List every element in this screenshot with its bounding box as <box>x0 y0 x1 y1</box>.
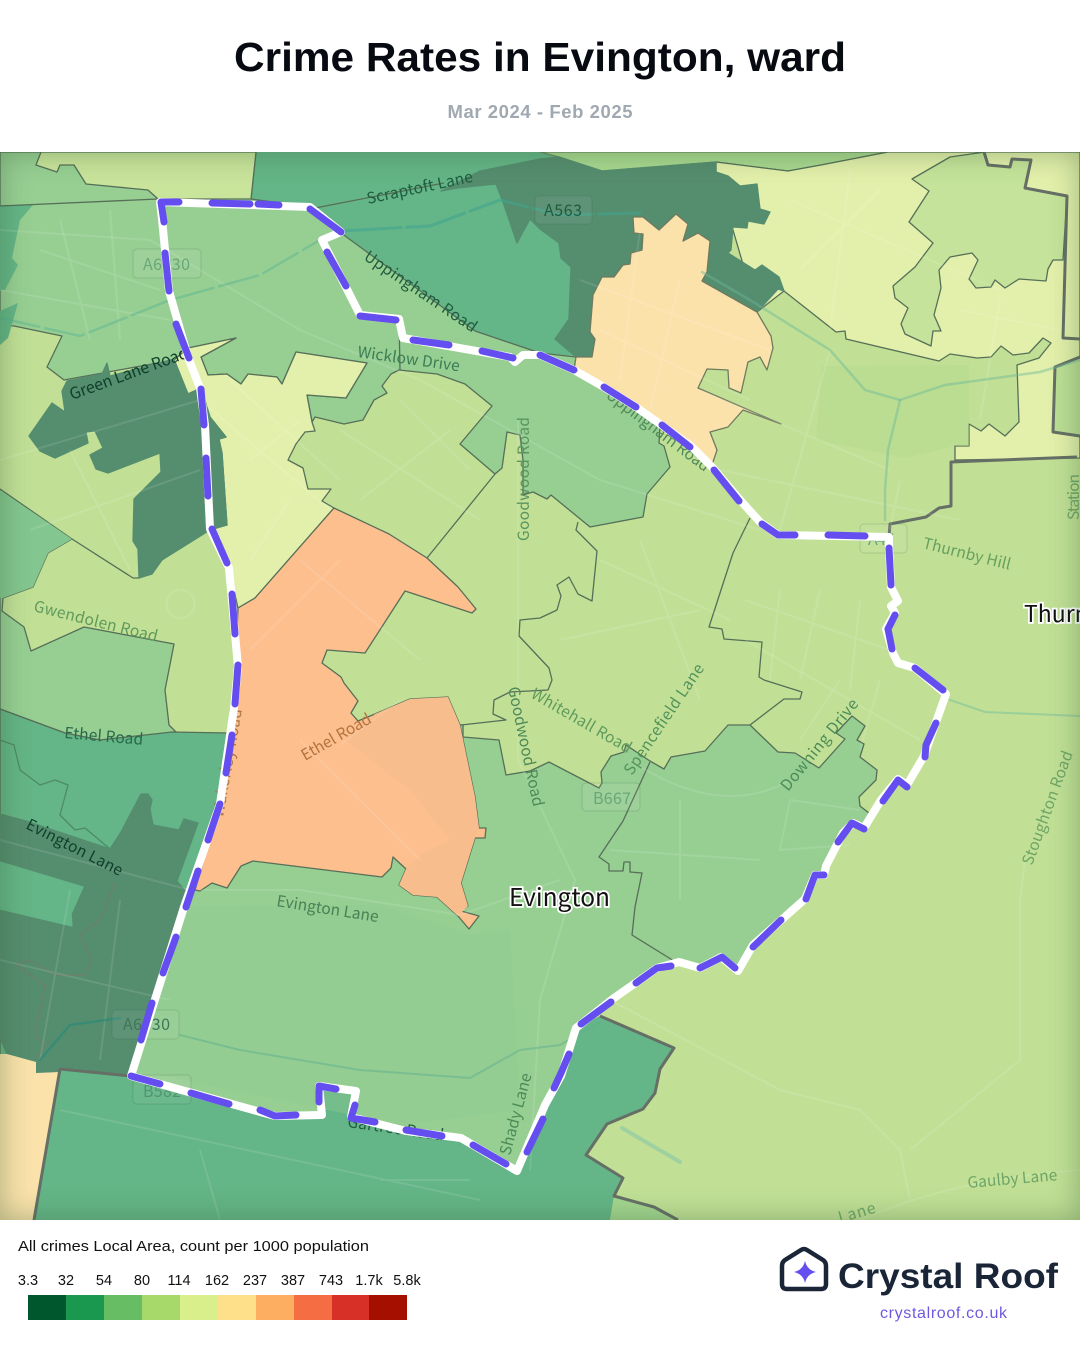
legend <box>18 1239 421 1320</box>
map road labels: Uppingham Road <box>602 383 715 476</box>
map road labels: Shady Lane <box>494 1070 537 1157</box>
legend scale values: 5.8k <box>393 1273 421 1289</box>
area: north dark green <box>441 157 784 357</box>
legend scale values <box>18 1273 421 1289</box>
legend scale values: 1.7k <box>355 1273 383 1289</box>
map road labels: Stoughton Road <box>1016 747 1078 868</box>
legend scale values: 743 <box>319 1273 343 1289</box>
area: central pale <box>174 338 367 608</box>
place label: Evington: Evington <box>509 879 610 914</box>
area: peach darker shading <box>345 697 479 916</box>
area: north strip <box>540 152 888 171</box>
legend scale values: 114 <box>167 1273 191 1289</box>
map road labels: Gartree Road <box>346 1110 445 1145</box>
area: east edge light green <box>1053 357 1080 436</box>
map road labels: Ethel Road <box>296 707 375 765</box>
map road labels: A6030 <box>143 251 190 275</box>
map road labels <box>23 165 1080 1228</box>
area: far-west teal lower <box>0 303 18 345</box>
area: west medium green lower <box>0 489 176 740</box>
area: far-west teal upper <box>0 205 33 290</box>
legend scale values: 387 <box>281 1273 305 1289</box>
map road labels: Evington Lane <box>23 813 127 881</box>
map road labels: A563 <box>544 197 582 221</box>
area: peach high crime <box>195 508 486 929</box>
map road labels: Uppingham Road <box>360 245 482 337</box>
website: crystalroof.co.uk <box>880 1305 1008 1322</box>
map edge vignette <box>0 152 1080 1220</box>
map road labels: Evington Lane <box>275 889 380 927</box>
wordmark: Crystal Roof <box>838 1257 1058 1296</box>
road number boxes <box>112 196 907 1104</box>
map area polygons <box>0 152 1080 1220</box>
map road labels: Lane <box>835 1196 878 1228</box>
map road labels: B582 <box>143 1078 181 1102</box>
map road labels: Goodwood Road <box>503 684 550 808</box>
legend scale values: 54 <box>96 1273 112 1289</box>
white footer band <box>0 1220 1080 1350</box>
map road labels: Gwendolen Road <box>32 595 160 647</box>
area: teal enclave in dark <box>0 862 83 926</box>
legend scale values: 237 <box>243 1273 267 1289</box>
map road labels: Wakerley Road <box>206 707 247 819</box>
area: south pale orange <box>0 1054 60 1220</box>
area: southern medium green <box>131 716 877 1171</box>
icon: house with star <box>782 1249 826 1289</box>
map road labels: Wicklow Drive <box>356 340 461 376</box>
area: west wedge darker green <box>0 490 72 598</box>
map road labels: Whitehall Road <box>528 682 636 758</box>
area: north-east light green island <box>893 152 1067 346</box>
map road labels: Downing Drive <box>775 693 863 795</box>
southern field shading <box>135 905 520 1125</box>
area: north-west pale notch <box>36 152 256 199</box>
map road labels: Green Lane Road <box>66 339 191 405</box>
interior boundary lines <box>0 183 802 1060</box>
area: north-east pale <box>716 152 1080 460</box>
area: pale orange north <box>574 214 781 465</box>
area: north teal <box>251 152 620 360</box>
map base <box>0 152 1080 1220</box>
title: Crime Rates in Evington, ward <box>234 34 846 80</box>
map road labels: Gaulby Lane <box>967 1163 1058 1193</box>
map road labels: Scraptoft Lane <box>364 165 475 209</box>
park shading <box>816 365 969 458</box>
area: western dark green <box>29 359 227 578</box>
legend colour scale <box>28 1295 407 1320</box>
map road labels: Thurnby Hill <box>921 532 1013 575</box>
ward boundary purple dashes <box>131 202 943 1164</box>
subtitle: Mar 2024 - Feb 2025 <box>448 101 632 122</box>
area: south-west dark green <box>0 794 198 1076</box>
logo: Crystal Roof <box>782 1249 1058 1322</box>
legend scale values: 162 <box>205 1273 229 1289</box>
map road labels: Goodwood Road <box>512 417 534 541</box>
rivers <box>0 200 1080 1162</box>
thick administrative boundaries <box>34 152 1080 1220</box>
area: south-east small green <box>610 1196 678 1220</box>
area: south-west teal <box>0 709 229 1076</box>
area: south teal <box>34 1016 674 1220</box>
legend scale values: 32 <box>58 1273 74 1289</box>
map road labels: A47 <box>868 526 894 550</box>
legend scale values: 80 <box>134 1273 150 1289</box>
roads <box>0 170 1080 1220</box>
ward boundary white casing <box>131 202 946 1171</box>
map road labels: Spencefield Lane <box>618 659 709 779</box>
map road labels: B667 <box>593 785 631 809</box>
legend title: All crimes Local Area, count per 1000 population <box>18 1239 369 1255</box>
white title band <box>0 0 1080 152</box>
legend scale values: 3.3 <box>18 1273 38 1289</box>
map road labels: A6030 <box>123 1011 170 1035</box>
map road labels: Ethel Road <box>64 721 144 750</box>
area: north-west and central medium green <box>0 152 670 527</box>
